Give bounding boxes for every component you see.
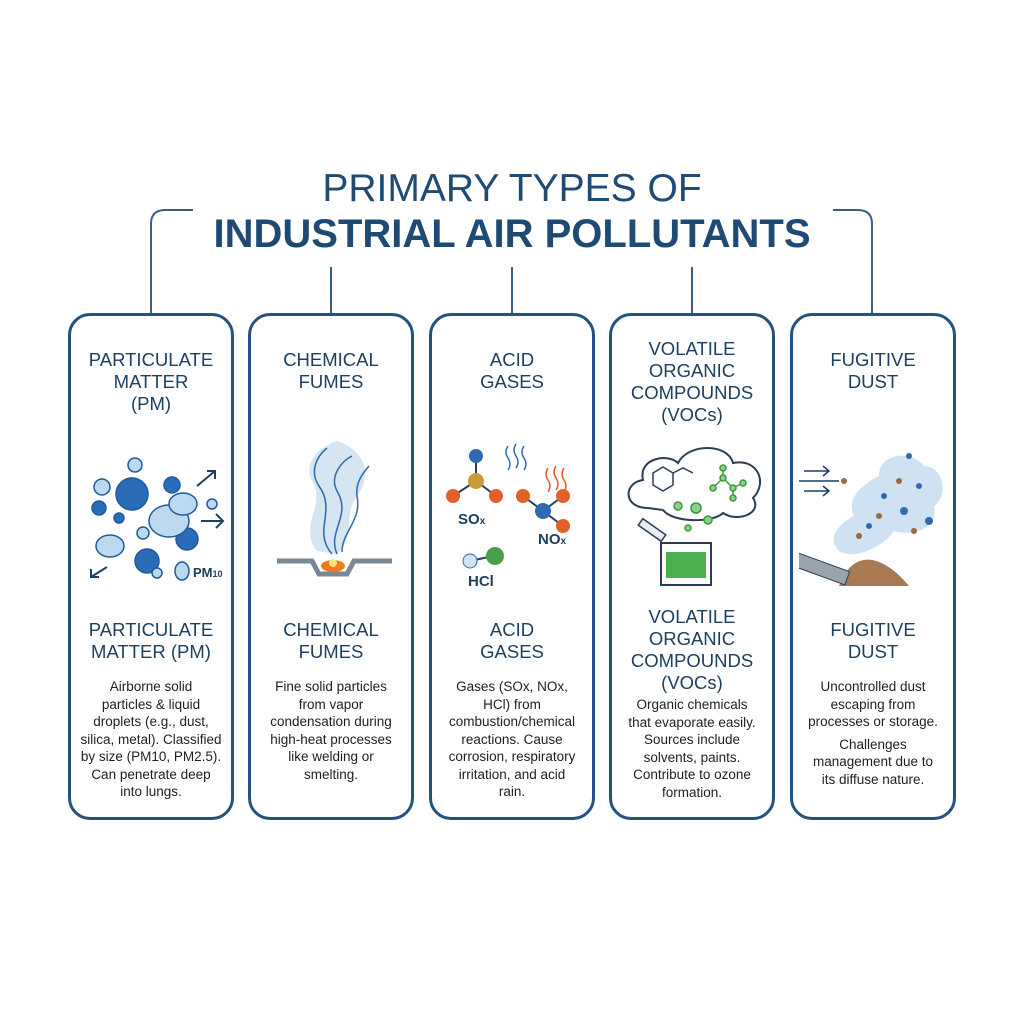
- text: description: its diffuse nature.: [822, 772, 924, 786]
- heading top: [283, 349, 379, 392]
- text: description: condensation during: [270, 714, 392, 729]
- text: description: rain.: [499, 784, 525, 799]
- heading top: DUST: [848, 371, 898, 392]
- text: description: corrosion, respiratory: [449, 749, 575, 764]
- icon: particles: PM10: [193, 565, 223, 580]
- title: INDUSTRIAL AIR POLLUTANTS: [213, 212, 810, 256]
- text: description: Can penetrate deep: [91, 766, 211, 782]
- text: description: Fine solid particles: [275, 679, 387, 694]
- panel: chemical fumes: [248, 313, 414, 820]
- heading top: [89, 349, 213, 414]
- text: description: Gases (SOx, NOx,: [456, 679, 568, 694]
- heading bottom: ORGANIC: [649, 628, 735, 649]
- text: description: formation.: [662, 784, 722, 800]
- text: description: Uncontrolled dust: [820, 679, 926, 694]
- text: description: Organic chemicals: [636, 697, 748, 712]
- icon: molecules: NOx: [538, 531, 566, 548]
- icon: molecules: [446, 444, 570, 586]
- heading bottom: FUMES: [299, 641, 363, 662]
- text: description: HCl) from: [483, 696, 541, 712]
- text: description: silica, metal). Classified: [80, 732, 222, 746]
- heading bottom: [631, 606, 753, 693]
- panel: acid gases: [429, 313, 595, 820]
- heading top: FUGITIVE: [830, 349, 916, 370]
- text: description: [628, 697, 756, 800]
- heading top: [830, 349, 916, 392]
- text: description: Sources include: [644, 732, 740, 747]
- heading bottom: VOLATILE: [648, 606, 736, 627]
- text: description: like welding or: [288, 749, 374, 764]
- heading bottom: GASES: [480, 641, 544, 662]
- text: description: high-heat processes: [270, 732, 392, 746]
- panel: VOCs: [609, 313, 775, 820]
- heading top: (PM): [131, 393, 171, 414]
- heading bottom: [89, 619, 213, 662]
- text: description: particles & liquid: [102, 696, 200, 712]
- heading bottom: DUST: [848, 641, 898, 662]
- heading top: CHEMICAL: [283, 349, 379, 370]
- heading top: ACID: [490, 349, 534, 370]
- text: description: Contribute to ozone: [633, 767, 751, 782]
- text: description: that evaporate easily.: [628, 714, 756, 730]
- icon: welding fumes: [277, 441, 392, 576]
- heading bottom: ACID: [490, 619, 534, 640]
- text: description: processes or storage. Challenges: [808, 714, 938, 752]
- text: description: smelting.: [304, 766, 358, 782]
- heading bottom: [480, 619, 544, 662]
- text: description: escaping from: [831, 696, 915, 712]
- icon: solvent can with cloud: [628, 447, 762, 586]
- heading top: COMPOUNDS: [631, 382, 753, 403]
- heading top: GASES: [480, 371, 544, 392]
- heading top: [631, 338, 753, 425]
- text: description: [270, 679, 392, 782]
- heading bottom: PARTICULATE: [89, 619, 213, 640]
- heading top: [480, 349, 544, 392]
- text: description: irritation, and acid: [459, 766, 565, 782]
- text: description: management due to: [813, 754, 933, 769]
- panel: fugitive dust: [790, 313, 956, 820]
- title: [213, 167, 810, 256]
- heading top: PARTICULATE: [89, 349, 213, 370]
- text: description: [808, 679, 938, 786]
- heading bottom: CHEMICAL: [283, 619, 379, 640]
- icon: particles: [90, 457, 224, 581]
- heading top: MATTER: [114, 371, 188, 392]
- heading top: VOLATILE: [648, 338, 736, 359]
- heading top: ORGANIC: [649, 360, 735, 381]
- icon: molecules: SOx: [458, 511, 486, 528]
- heading bottom: [830, 619, 916, 662]
- icon: dust cloud: [799, 453, 943, 586]
- text: description: droplets (e.g., dust,: [93, 714, 209, 729]
- text: description: solvents, paints.: [644, 750, 740, 764]
- text: description: by size (PM10, PM2.5).: [81, 749, 221, 764]
- text: description: into lungs.: [120, 784, 182, 799]
- text: description: from vapor: [299, 696, 363, 712]
- text: description: [449, 679, 576, 799]
- heading top: FUMES: [299, 371, 363, 392]
- heading top: (VOCs): [661, 404, 723, 425]
- heading bottom: [283, 619, 379, 662]
- text: description: Airborne solid: [110, 679, 192, 694]
- text: description: [80, 679, 222, 799]
- text: description: combustion/chemical: [449, 714, 575, 729]
- text: description: reactions. Cause: [461, 732, 563, 746]
- heading bottom: COMPOUNDS: [631, 650, 753, 671]
- heading bottom: MATTER (PM): [91, 641, 211, 662]
- heading bottom: (VOCs): [661, 672, 723, 693]
- title: PRIMARY TYPES OF: [322, 167, 702, 210]
- heading bottom: FUGITIVE: [830, 619, 916, 640]
- panel: particulate matter: [68, 313, 234, 820]
